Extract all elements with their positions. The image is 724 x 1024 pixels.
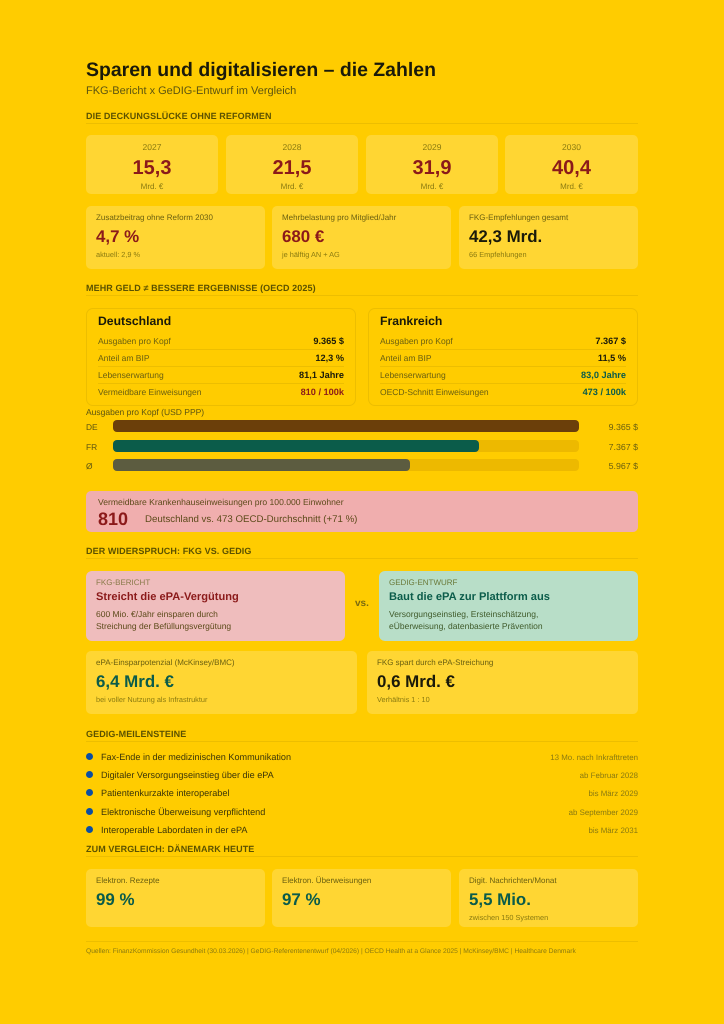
card: 2029 xyxy=(366,135,498,194)
milestone: Überweisung: ab September 2029 xyxy=(569,808,638,817)
milestone: Labordaten: Interoperable Labordaten in der ePA xyxy=(101,825,247,835)
row: Lebenserwartung: Lebenserwartung xyxy=(98,370,164,380)
card: FKG-Empfehlungen: 42,3 Mrd. xyxy=(469,227,542,246)
row: Ausgaben: Ausgaben pro Kopf xyxy=(98,336,171,346)
card: Zusatzbeitrag: 4,7 % xyxy=(96,227,139,246)
card: 2029: 2029 xyxy=(423,142,441,152)
row: Einweisungen: Vermeidbare Einweisungen xyxy=(98,387,201,397)
row: Einweisungen xyxy=(380,387,626,397)
bar chart: Ausgaben pro Kopf xyxy=(86,407,638,471)
row: Lebenserwartung xyxy=(380,367,626,384)
milestone: Überweisung: Elektronische Überweisung verpflichtend xyxy=(101,807,265,817)
callout: Krankenhauseinweisungen: Vermeidbare Krankenhauseinweisungen pro 100.000 Einwohner xyxy=(98,497,344,507)
milestone: Versorgungseinstieg xyxy=(86,770,638,780)
card: Überweisungen: 97 % xyxy=(282,890,320,909)
label: vs.: vs. xyxy=(355,598,369,609)
card: FKG-Empfehlungen: FKG-Empfehlungen gesamt xyxy=(469,213,568,222)
card: Nachrichten: Digit. Nachrichten/Monat xyxy=(469,876,557,885)
title: Sparen und digitalisieren – die Zahlen xyxy=(86,59,436,81)
row: BIP: Anteil am BIP xyxy=(380,353,432,363)
card: 2030: Mrd. € xyxy=(560,182,583,191)
card: Rezepte: 99 % xyxy=(96,890,134,909)
panel: FKG-Bericht: Streicht die ePA-Vergütung xyxy=(96,591,239,603)
row: Einweisungen: 473 / 100k xyxy=(583,387,626,397)
row: Lebenserwartung: Lebenserwartung xyxy=(380,370,446,380)
heading: Mehr Geld: MEHR GELD ≠ BESSERE ERGEBNISSE (OECD 2025) xyxy=(86,283,316,293)
footer: Quellen: Quellen: FinanzKommission Gesundheit (30.03.2026) | GeDIG-Referentenentwurf (04/2026) | OECD Health at a Glance 2025 | McKinsey/BMC | Healthcare Denmark xyxy=(86,948,576,955)
card: FKG spart: Verhältnis 1 : 10 xyxy=(377,695,430,704)
bar DE: DE xyxy=(86,422,98,432)
bar average: 5.967 $ xyxy=(609,461,638,471)
row: Lebenserwartung: 81,1 Jahre xyxy=(299,370,344,380)
card: Rezepte xyxy=(86,869,265,927)
bar FR xyxy=(86,440,638,452)
row: BIP xyxy=(98,350,344,367)
panel: FKG-Bericht xyxy=(86,571,345,641)
card: 2028: Mrd. € xyxy=(281,182,303,191)
card: 2028: 21,5 xyxy=(273,157,311,179)
bar FR: FR xyxy=(86,442,97,452)
card: FKG spart: 0,6 Mrd. € xyxy=(377,672,455,691)
card: 2027: Mrd. € xyxy=(141,182,163,191)
milestone: Fax-Ende: Fax-Ende in der medizinischen Kommunikation xyxy=(101,752,291,762)
card: 2029: 31,9 xyxy=(413,157,451,179)
milestone: Überweisung xyxy=(86,807,638,817)
row: Einweisungen: OECD-Schnitt Einweisungen xyxy=(380,387,489,397)
subtitle: FKG-Bericht x GeDIG-Entwurf im Vergleich xyxy=(86,85,296,97)
panel: FKG-Bericht: 600 Mio. €/Jahr einsparen durch xyxy=(96,609,218,619)
milestone: Labordaten xyxy=(86,825,638,835)
card: Mehrbelastung xyxy=(272,206,451,269)
card: FKG-Empfehlungen xyxy=(459,206,638,269)
panel: GeDIG-Entwurf: eÜberweisung, datenbasierte Prävention xyxy=(389,621,543,631)
heading: Dänemark: ZUM VERGLEICH: DÄNEMARK HEUTE xyxy=(86,844,254,854)
row: BIP: Anteil am BIP xyxy=(98,353,150,363)
panel: Deutschland xyxy=(86,308,356,406)
panel: Frankreich xyxy=(368,308,638,406)
card: Überweisungen: Elektron. Überweisungen xyxy=(282,876,371,885)
heading: Meilensteine: GEDIG-MEILENSTEINE xyxy=(86,729,186,739)
callout: Krankenhauseinweisungen xyxy=(86,491,638,532)
card: 2030: 2030 xyxy=(562,142,581,152)
row: Lebenserwartung: 83,0 Jahre xyxy=(581,370,626,380)
bar average: Ø xyxy=(86,461,93,471)
card: Überweisungen xyxy=(272,869,451,927)
card: 2028 xyxy=(226,135,358,194)
row: Ausgaben xyxy=(380,333,626,350)
heading: Deckungslücke: DIE DECKUNGSLÜCKE OHNE REFORMEN xyxy=(86,111,272,121)
card: 2030: 40,4 xyxy=(552,157,591,179)
country name: Frankreich xyxy=(380,314,442,328)
card: 2029: Mrd. € xyxy=(421,182,443,191)
card: Nachrichten: zwischen 150 Systemen xyxy=(469,913,548,922)
card: FKG spart: FKG spart durch ePA-Streichung xyxy=(377,658,493,667)
milestone: Patientenkurzakte: Patientenkurzakte interoperabel xyxy=(101,788,229,798)
card: Zusatzbeitrag: Zusatzbeitrag ohne Reform 2030 xyxy=(96,213,213,222)
card: ePA-Einsparpotenzial xyxy=(86,651,357,714)
card: ePA-Einsparpotenzial: ePA-Einsparpotenzial (McKinsey/BMC) xyxy=(96,658,235,667)
card: Nachrichten: 5,5 Mio. xyxy=(469,890,531,909)
card: FKG spart xyxy=(367,651,638,714)
panel: GeDIG-Entwurf: Versorgungseinstieg, Ersteinschätzung, xyxy=(389,609,538,619)
row: Einweisungen: 810 / 100k xyxy=(301,387,344,397)
card: Mehrbelastung: je hälftig AN + AG xyxy=(282,250,340,259)
card: Mehrbelastung: 680 € xyxy=(282,227,324,246)
panel: GeDIG-Entwurf: Baut die ePA zur Plattform aus xyxy=(389,591,550,603)
milestone: Patientenkurzakte xyxy=(86,788,638,798)
milestone: Versorgungseinstieg: ab Februar 2028 xyxy=(580,771,638,780)
callout: Krankenhauseinweisungen: Deutschland vs. 473 OECD-Durchschnitt (+71 %) xyxy=(145,514,357,525)
card: ePA-Einsparpotenzial: bei voller Nutzung als Infrastruktur xyxy=(96,695,207,704)
row: Einweisungen xyxy=(98,387,344,397)
card: ePA-Einsparpotenzial: 6,4 Mrd. € xyxy=(96,672,174,691)
milestone: Patientenkurzakte: bis März 2029 xyxy=(588,789,638,798)
card: Nachrichten xyxy=(459,869,638,927)
row: BIP xyxy=(380,350,626,367)
callout: Krankenhauseinweisungen: 810 xyxy=(98,508,128,528)
card: 2027: 2027 xyxy=(143,142,161,152)
panel: GeDIG-Entwurf: GEDIG-ENTWURF xyxy=(389,578,457,587)
panel: GeDIG-Entwurf xyxy=(379,571,638,641)
list: Meilensteine xyxy=(86,752,638,835)
card: 2027 xyxy=(86,135,218,194)
chart title: Ausgaben pro Kopf (USD PPP) xyxy=(86,407,204,417)
bar FR: 7.367 $ xyxy=(609,442,638,452)
milestone: Fax-Ende: 13 Mo. nach Inkrafttreten xyxy=(550,753,638,762)
bar average xyxy=(86,459,638,471)
card: Zusatzbeitrag: aktuell: 2,9 % xyxy=(96,250,140,259)
card: 2027: 15,3 xyxy=(133,157,171,179)
country name: Deutschland xyxy=(98,314,171,328)
card: 2030 xyxy=(505,135,638,194)
bar DE xyxy=(86,420,638,432)
card: Rezepte: Elektron. Rezepte xyxy=(96,876,160,885)
milestone: Labordaten: bis März 2031 xyxy=(588,826,638,835)
row: Ausgaben: 7.367 $ xyxy=(595,336,626,346)
milestone: Fax-Ende xyxy=(86,752,638,762)
card: FKG-Empfehlungen: 66 Empfehlungen xyxy=(469,250,527,259)
row: Lebenserwartung xyxy=(98,367,344,384)
row: BIP: 12,3 % xyxy=(315,353,344,363)
row: Ausgaben xyxy=(98,333,344,350)
row: Ausgaben: Ausgaben pro Kopf xyxy=(380,336,453,346)
row: Ausgaben: 9.365 $ xyxy=(313,336,344,346)
heading: Widerspruch: DER WIDERSPRUCH: FKG VS. GEDIG xyxy=(86,546,252,556)
milestone: Versorgungseinstieg: Digitaler Versorgungseinstieg über die ePA xyxy=(101,770,274,780)
card: Mehrbelastung: Mehrbelastung pro Mitglied/Jahr xyxy=(282,213,396,222)
row: BIP: 11,5 % xyxy=(598,353,626,363)
panel: FKG-Bericht: FKG-BERICHT xyxy=(96,578,150,587)
card: 2028: 2028 xyxy=(283,142,301,152)
bar DE: 9.365 $ xyxy=(609,422,638,432)
card: Zusatzbeitrag xyxy=(86,206,265,269)
panel: FKG-Bericht: Streichung der Befüllungsvergütung xyxy=(96,621,231,631)
